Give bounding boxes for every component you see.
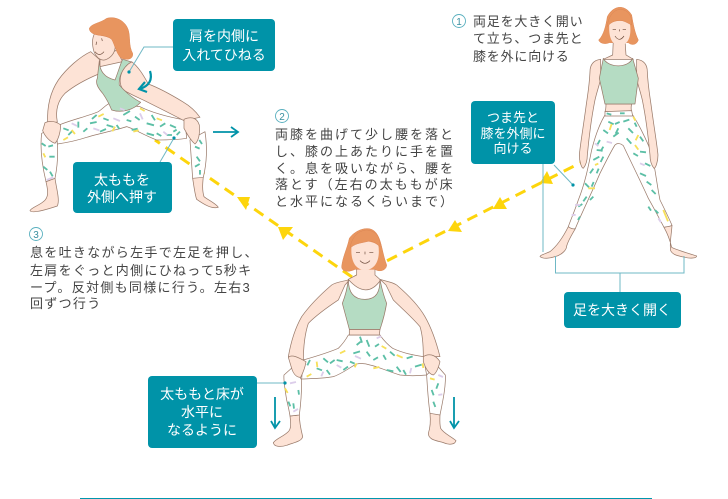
step 2 text block: と水平になるくらいまで） [275,194,455,209]
icon: curved twist arrow on shoulder [139,71,151,92]
callout: turn toes and knees outward: 膝を外側に [480,126,546,141]
step 3 text block: ープ。反対側も同様に行う。左右3 [30,280,251,295]
callout: open legs wide [564,292,681,328]
step 3 text block: 息を吐きながら左手で左足を押し、 [30,245,259,260]
step 2 text block: く。息を吸いながら、腰を [275,161,455,176]
step 2 text block: 落とす（左右の太ももが床 [275,177,455,192]
step 1 text block: 両足を大きく開い [473,14,583,29]
callout: push thigh outward: 太ももを [94,172,150,188]
step 1 text block: 1 [456,17,462,28]
step 3 text block: 左肩をぐっと内側にひねって5秒キ [30,263,252,278]
step 2 text block [275,110,455,209]
step 1 text block: て立ち、つま先と [473,31,583,46]
callout: turn toes and knees outward: 向ける [493,141,533,156]
yellow dashed flow line: step 2 to step 3 [155,140,352,277]
icon: down arrow right leg [450,397,459,428]
icon: arrow pointing right [213,127,238,137]
callout: open legs wide: 足を大きく開く [573,302,671,318]
step 3 text block: 3 [33,230,39,241]
callout: turn toes and knees outward [471,101,555,164]
step 3 text block: 回ずつ行う [30,296,102,311]
callout: twist shoulder inward: 肩を内側に [189,28,259,44]
step 3 text block [30,228,259,311]
callout: thigh parallel to floor: なるように [167,422,237,438]
callout: thigh parallel to floor: 水平に [181,404,223,420]
callout: twist shoulder inward: 入れてひねる [182,47,266,63]
icon: down arrow left leg [271,397,280,428]
callout: thigh parallel to floor [148,376,257,448]
step 2 text block: し、膝の上あたりに手を置 [275,144,455,159]
yellow dashed flow line: step 1 to step 2 [355,162,582,277]
leader lines and callout connectors [129,47,684,383]
illustration: step 3 twisting pose [30,18,218,212]
callout: turn toes and knees outward: つま先と [487,110,539,125]
step 2 text block: 2 [279,112,285,123]
bottom teal rule [80,498,652,499]
illustration: step 2 squat pose [273,229,456,446]
step 1 text block [452,14,583,64]
leader line end dots [127,70,575,385]
illustration: step 1 standing pose [540,7,697,258]
callout: push thigh outward: 外側へ押す [87,189,157,205]
step 2 text block: 両膝を曲げて少し腰を落と [275,127,455,142]
callout: twist shoulder inward [173,19,275,71]
step 1 text block: 膝を外に向ける [473,49,570,64]
callout: thigh parallel to floor: 太ももと床が [160,386,244,402]
callout: push thigh outward [73,162,172,213]
